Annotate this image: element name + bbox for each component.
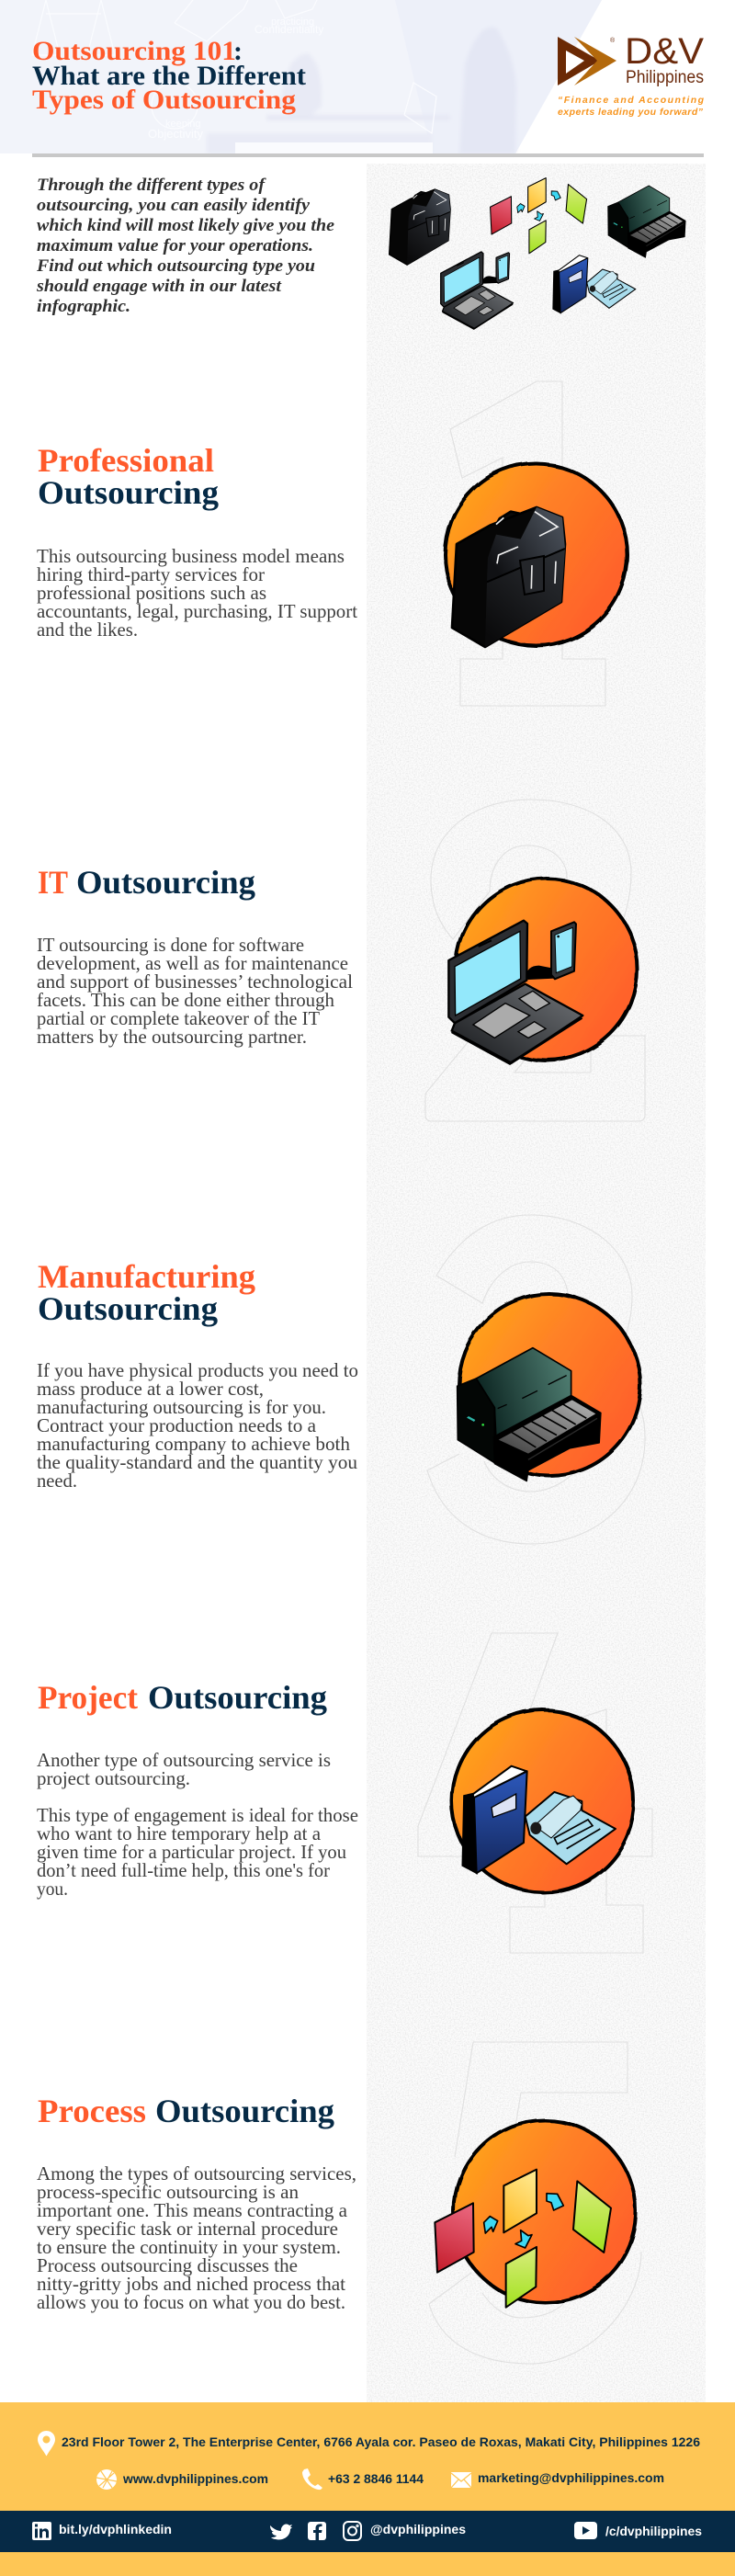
- intro text: Through the different types of: [37, 176, 266, 195]
- body text: project outsourcing.: [37, 1767, 190, 1789]
- intro text: which kind will most likely give you the: [37, 216, 335, 235]
- body text: development, as well as for maintenance: [37, 952, 348, 974]
- body text: process-specific outsourcing is an: [37, 2181, 299, 2203]
- website: www.dvphilippines.com: [122, 2471, 268, 2486]
- footer: yellow background: [0, 2402, 735, 2576]
- section 5: Process Outsourcing: [37, 2093, 636, 2313]
- footer: social bar: [0, 2511, 735, 2552]
- intro icon cluster: [390, 178, 685, 329]
- body text: IT outsourcing is done for software: [37, 934, 304, 956]
- social handle: @dvphilippines: [370, 2522, 466, 2536]
- header background image: Objectivity: [148, 127, 203, 141]
- heading: Outsourcing: [155, 2093, 334, 2129]
- body text: This type of engagement is ideal for those: [37, 1804, 358, 1826]
- icon: orange circle with documents: [435, 2120, 636, 2308]
- numeral 5 outline: [429, 2042, 641, 2364]
- faint line art: [32, 0, 436, 133]
- body text: partial or complete takeover of the IT: [37, 1007, 320, 1029]
- grainy right panel: [367, 164, 706, 2402]
- heading: [38, 2093, 334, 2129]
- numeral 1 outline: [450, 381, 605, 706]
- icon: linkedin: [32, 2522, 51, 2540]
- body text: If you have physical products you need to: [37, 1359, 358, 1381]
- icon: twitter: [270, 2525, 292, 2539]
- icon: laptop small: [441, 252, 514, 329]
- header background image: practicing: [271, 17, 314, 28]
- title: What are the Different: [32, 61, 306, 91]
- icon: logo arrow mark: [558, 37, 616, 85]
- icon: book small: [553, 255, 636, 313]
- header background image: Confidentiality: [254, 23, 323, 36]
- phone number: +63 2 8846 1144: [328, 2471, 424, 2486]
- body text: manufacturing company to achieve both: [37, 1433, 351, 1455]
- body text: Another type of outsourcing service is: [37, 1749, 331, 1771]
- body text: you.: [37, 1878, 68, 1900]
- icon: orange circle with book and paper: [452, 1710, 634, 1892]
- body text: Among the types of outsourcing services,: [37, 2162, 356, 2184]
- footer: contact details: [38, 2431, 700, 2490]
- body text: hiring third-party services for: [37, 563, 265, 585]
- logo: D&V Philippines: [558, 31, 705, 118]
- heading: [38, 1258, 255, 1327]
- body text: [37, 2162, 356, 2313]
- body text: manufacturing outsourcing is for you.: [37, 1396, 326, 1418]
- heading: Outsourcing: [76, 864, 255, 901]
- intro text: outsourcing, you can easily identify: [37, 196, 311, 215]
- body text: accountants, legal, purchasing, IT support: [37, 600, 357, 622]
- intro text: maximum value for your operations.: [37, 236, 313, 255]
- title: [32, 36, 306, 115]
- body text: This outsourcing business model means: [37, 545, 345, 567]
- body text: the quality-standard and the quantity you: [37, 1451, 357, 1473]
- body text: need.: [37, 1470, 77, 1492]
- body text: very specific task or internal procedure: [37, 2218, 338, 2240]
- title: :: [233, 36, 243, 66]
- body text: [37, 934, 353, 1048]
- icon: globe: [96, 2469, 117, 2490]
- icon: orange circle with machine: [458, 1294, 640, 1481]
- body text: nitty-gritty jobs and niched process that: [37, 2273, 345, 2295]
- icon: facebook: [308, 2522, 326, 2540]
- linkedin handle: bit.ly/dvphlinkedin: [59, 2522, 172, 2536]
- body text: important one. This means contracting a: [37, 2199, 348, 2221]
- body text: given time for a particular project. If you: [37, 1841, 346, 1863]
- icon: orange circle with laptop and phone: [448, 879, 638, 1063]
- icon: orange circle with briefcase: [445, 463, 627, 647]
- youtube handle: /c/dvphilippines: [605, 2524, 702, 2538]
- body text: professional positions such as: [37, 582, 266, 604]
- logo: D&V Philippines: “Finance and Accounting: [558, 95, 705, 106]
- logo: D&V Philippines: D&V: [625, 31, 704, 72]
- intro text: infographic.: [37, 297, 130, 316]
- section 3: Manufacturing Outsourcing: [37, 1258, 640, 1492]
- icon: mail: [451, 2472, 471, 2488]
- address: 23rd Floor Tower 2, The Enterprise Center, 6766 Ayala cor. Paseo de Roxas, Makati City, Philippines 1226: [62, 2434, 700, 2449]
- body text: who want to hire temporary help at a: [37, 1822, 322, 1844]
- heading: [38, 442, 219, 511]
- logo: D&V Philippines: experts leading you forward”: [558, 107, 704, 118]
- body text: matters by the outsourcing partner.: [37, 1026, 307, 1048]
- title: Outsourcing 101: [32, 36, 236, 66]
- heading: Manufacturing: [38, 1258, 255, 1295]
- body text: Contract your production needs to a: [37, 1414, 317, 1436]
- logo: D&V Philippines: ®: [610, 37, 616, 44]
- logo: D&V Philippines: Philippines: [626, 68, 704, 87]
- intro text: should engage with in our latest: [36, 277, 282, 296]
- heading: Outsourcing: [148, 1679, 327, 1716]
- intro text: [36, 176, 335, 316]
- numeral 4 outline: [418, 1633, 652, 1953]
- body text: [37, 1359, 358, 1492]
- icon: youtube: [574, 2522, 597, 2539]
- body text: Process outsourcing discusses the: [37, 2254, 298, 2276]
- header background image: keeping: [165, 119, 201, 130]
- body text: don’t need full-time help, this one's for: [37, 1859, 330, 1881]
- heading: Professional: [38, 442, 214, 479]
- heading: Outsourcing: [38, 474, 219, 511]
- title: Types of Outsourcing: [32, 85, 296, 115]
- numeral 2 outline: [425, 800, 645, 1121]
- icon: location pin: [38, 2431, 55, 2456]
- section 2: IT Outsourcing: [37, 864, 638, 1063]
- body text: to ensure the continuity in your system.: [37, 2236, 341, 2258]
- body text: and the likes.: [37, 618, 138, 641]
- numeral 3 outline: [427, 1215, 645, 1544]
- icon: documents small: [491, 178, 587, 254]
- section 4: Project Outsourcing: [37, 1679, 634, 1900]
- icon: instagram: [344, 2522, 361, 2540]
- heading: Outsourcing: [38, 1290, 218, 1327]
- heading: Project: [38, 1679, 138, 1716]
- section 1: Professional Outsourcing: [37, 442, 627, 647]
- body text: facets. This can be done either through: [37, 989, 334, 1011]
- body text: allows you to focus on what you do best.: [37, 2291, 345, 2313]
- icon: briefcase small: [390, 189, 450, 265]
- heading: [38, 1679, 327, 1716]
- body text: mass produce at a lower cost,: [37, 1378, 264, 1400]
- icon: machine small: [608, 186, 685, 257]
- heading: Process: [38, 2093, 146, 2129]
- header divider: [32, 153, 704, 157]
- body text: [37, 545, 357, 641]
- body text: [37, 1749, 358, 1900]
- heading: IT: [38, 864, 68, 901]
- icon: phone: [302, 2468, 322, 2490]
- intro text: Find out which outsourcing type you: [36, 256, 315, 276]
- body text: and support of businesses’ technological: [37, 970, 353, 993]
- header background image: [0, 0, 602, 153]
- email: marketing@dvphilippines.com: [478, 2470, 664, 2485]
